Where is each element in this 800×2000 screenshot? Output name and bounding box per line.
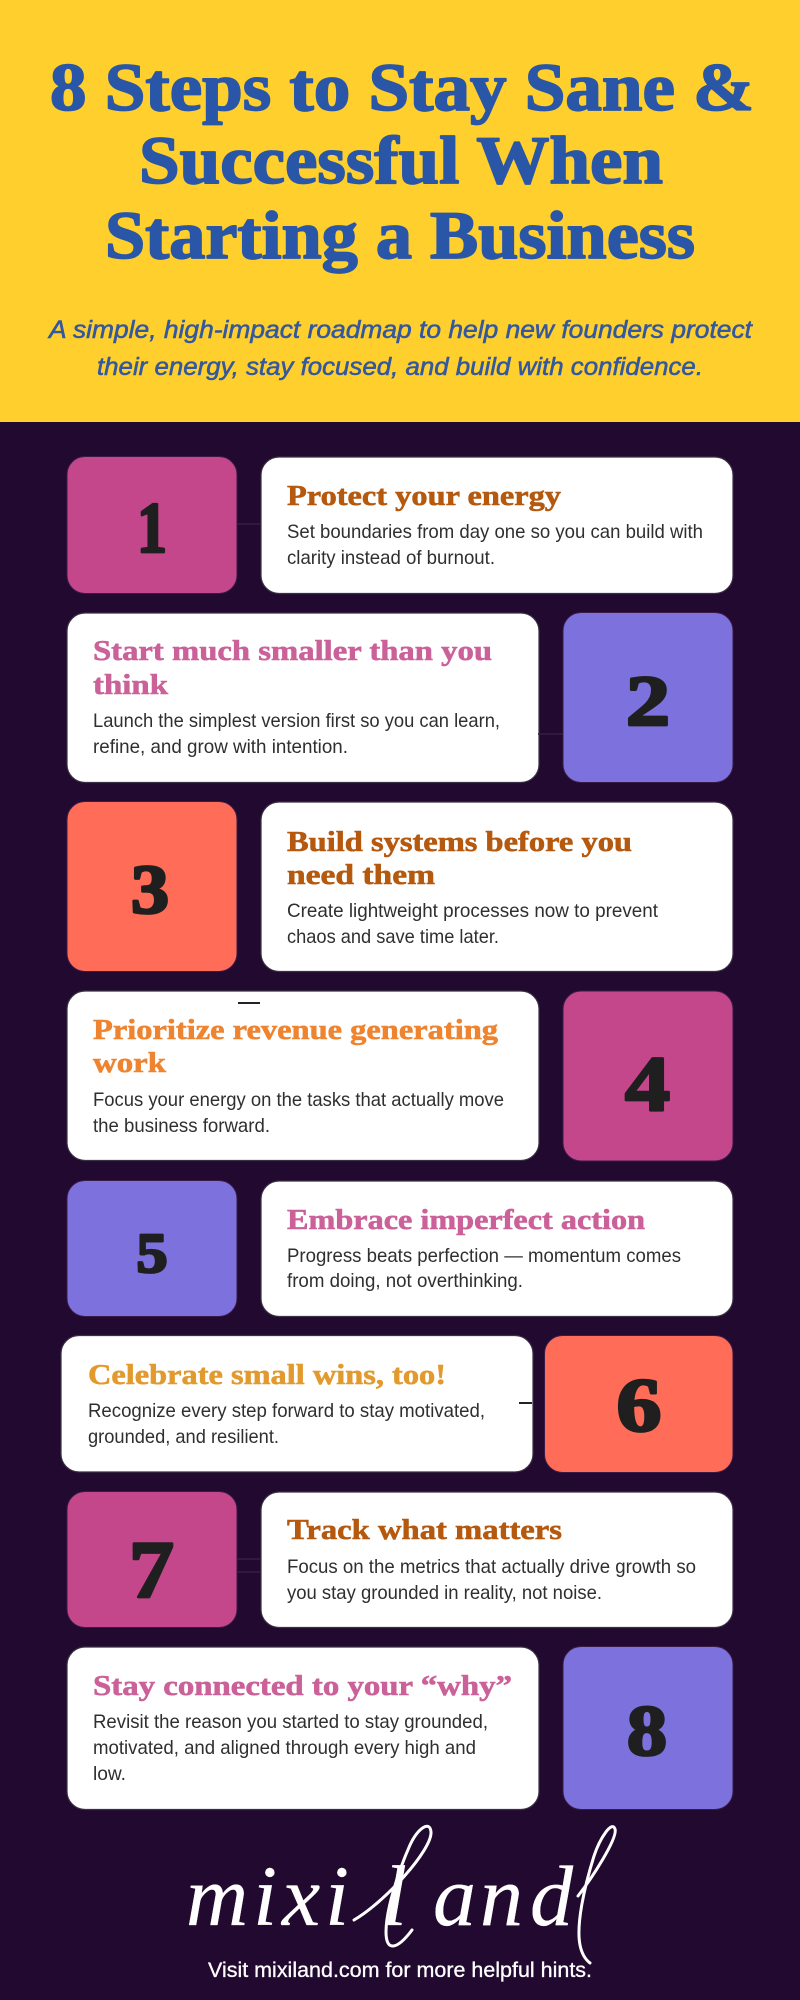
card 6: Recognize every step forward to stay motivated, bbox=[88, 1400, 485, 1422]
number tile 4: 4 bbox=[625, 1040, 670, 1127]
number tile 7: 7 bbox=[129, 1524, 174, 1615]
card 5 bbox=[261, 1181, 733, 1316]
card 1: Set boundaries from day one so you can build with bbox=[287, 521, 703, 543]
card 7 bbox=[261, 1492, 733, 1628]
logo: mixiland: an bbox=[433, 1848, 527, 1944]
title bbox=[50, 49, 754, 273]
card 8: Stay connected to your “why” bbox=[93, 1670, 512, 1702]
step 6 bbox=[61, 1336, 733, 1472]
step 7 bbox=[67, 1492, 733, 1628]
logo: mixiland: d bbox=[530, 1848, 574, 1944]
card 6: grounded, and resilient. bbox=[88, 1426, 279, 1448]
number tile 5 bbox=[67, 1180, 237, 1316]
card 4: Prioritize revenue generating bbox=[93, 1014, 499, 1046]
number tile 7 bbox=[67, 1492, 237, 1628]
card 7: Track what matters bbox=[287, 1514, 562, 1546]
card 1: Protect your energy bbox=[287, 480, 562, 512]
title: Starting a Business bbox=[105, 197, 695, 273]
title: 8 Steps to Stay Sane & bbox=[50, 49, 754, 125]
card 6: Celebrate small wins, too! bbox=[88, 1359, 446, 1391]
card 3: Create lightweight processes now to prevent bbox=[287, 900, 659, 922]
step 5 bbox=[67, 1180, 733, 1316]
card 8: low. bbox=[93, 1763, 126, 1785]
number tile 5: 5 bbox=[136, 1223, 168, 1285]
logo: mixiland: l bbox=[383, 1848, 407, 1944]
number tile 2: 2 bbox=[626, 661, 670, 741]
number tile 8: 8 bbox=[627, 1691, 667, 1771]
step 8 bbox=[67, 1646, 733, 1810]
subtitle: their energy, stay focused, and build with confidence. bbox=[97, 353, 703, 381]
card 2: refine, and grow with intention. bbox=[93, 736, 348, 758]
subtitle bbox=[47, 316, 753, 381]
card 1: clarity instead of burnout. bbox=[287, 547, 495, 569]
card 2: Launch the simplest version first so you can learn, bbox=[93, 710, 500, 732]
card 3 bbox=[261, 802, 733, 972]
number tile 6 bbox=[544, 1336, 733, 1472]
title: Successful When bbox=[139, 122, 663, 198]
card 7: you stay grounded in reality, not noise. bbox=[287, 1582, 602, 1604]
card 4: the business forward. bbox=[93, 1115, 270, 1137]
card 2: think bbox=[93, 669, 169, 701]
number tile 6: 6 bbox=[616, 1364, 662, 1448]
step 2 bbox=[67, 612, 733, 782]
header panel bbox=[0, 0, 800, 422]
step 4 bbox=[67, 991, 733, 1161]
card 7: Focus on the metrics that actually drive growth so bbox=[287, 1556, 696, 1578]
logo: mixiland: mixi bbox=[186, 1848, 354, 1944]
card 2 bbox=[67, 613, 539, 782]
logo: mixiland bbox=[186, 1826, 615, 1963]
card 4: Focus your energy on the tasks that actually move bbox=[93, 1089, 504, 1111]
card 5: from doing, not overthinking. bbox=[287, 1270, 523, 1292]
card 8: Revisit the reason you started to stay grounded, bbox=[93, 1711, 488, 1733]
number tile 3 bbox=[67, 802, 237, 972]
card 1 bbox=[261, 457, 733, 594]
number tile 1 bbox=[67, 456, 237, 594]
step 1 bbox=[67, 456, 733, 594]
number tile 3: 3 bbox=[131, 852, 169, 929]
subtitle: A simple, high-impact roadmap to help new founders protect bbox=[47, 316, 753, 344]
card 6 bbox=[61, 1336, 533, 1472]
number tile 1: 1 bbox=[137, 488, 167, 568]
card 4 bbox=[67, 991, 539, 1160]
card 3: chaos and save time later. bbox=[287, 926, 499, 948]
card 2: Start much smaller than you bbox=[93, 635, 492, 667]
card 5: Embrace imperfect action bbox=[287, 1204, 645, 1236]
card 5: Progress beats perfection — momentum comes bbox=[287, 1245, 681, 1267]
card 4: work bbox=[93, 1047, 167, 1079]
number tile 8 bbox=[563, 1646, 733, 1810]
card 8 bbox=[67, 1647, 539, 1810]
card 8: motivated, and aligned through every high and bbox=[93, 1737, 476, 1759]
number tile 2 bbox=[563, 612, 733, 782]
card 3: need them bbox=[287, 859, 435, 891]
number tile 4 bbox=[563, 991, 733, 1161]
footer text: Visit mixiland.com for more helpful hints. bbox=[208, 1959, 592, 1982]
step 3 bbox=[67, 802, 733, 972]
card 3: Build systems before you bbox=[287, 826, 632, 858]
